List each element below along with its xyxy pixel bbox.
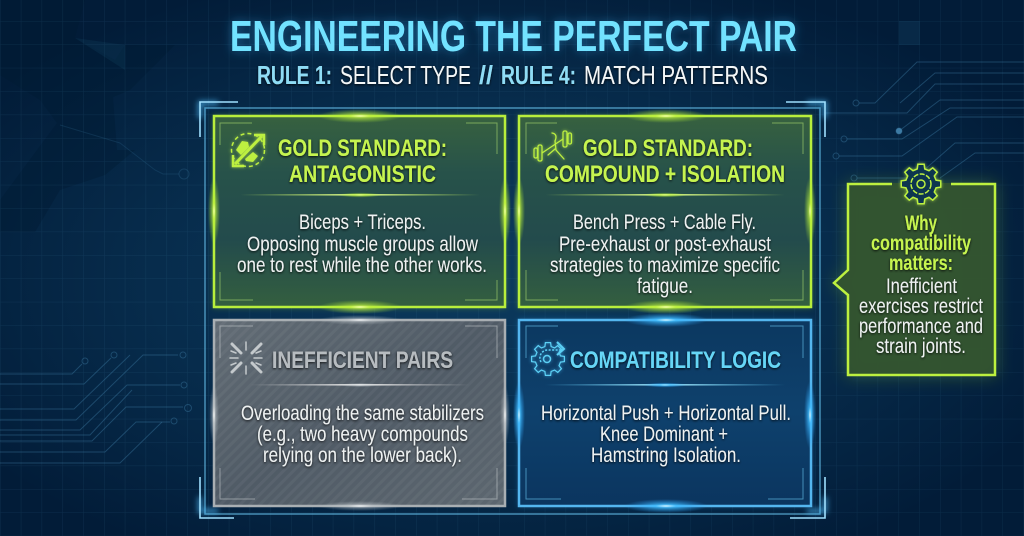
subtitle — [257, 60, 768, 90]
icon: dumbbell lift — [534, 131, 572, 161]
callout body — [859, 275, 983, 358]
body text: Pre-exhaust or post-exhaust — [559, 233, 771, 256]
body text: fatigue. — [637, 275, 693, 298]
callout body: strain joints. — [876, 335, 966, 358]
body text: Biceps + Triceps. — [299, 211, 426, 234]
title: ENGINEERING THE PERFECT PAIR — [230, 12, 797, 61]
icon: opposing arrows with gears — [232, 134, 264, 166]
callout heading: Why — [905, 212, 937, 235]
callout: why compatibility matters — [833, 164, 996, 376]
subtitle: SELECT TYPE — [340, 60, 471, 90]
heading — [278, 135, 447, 188]
callout heading — [871, 212, 971, 275]
body text: (e.g., two heavy compounds — [257, 423, 468, 446]
panel: antagonistic — [208, 109, 511, 314]
callout body: Inefficient — [886, 275, 957, 298]
panel: compound + isolation — [513, 109, 816, 314]
subtitle: RULE 4: — [501, 60, 576, 90]
panel: compatibility logic — [513, 313, 816, 513]
body text — [541, 402, 791, 467]
panel: inefficient pairs — [209, 315, 510, 511]
heading: COMPATIBILITY LOGIC — [570, 347, 781, 374]
heading: GOLD STANDARD: — [278, 135, 447, 162]
body text — [550, 211, 780, 298]
body text: Bench Press + Cable Fly. — [573, 211, 756, 234]
outer tech frame — [200, 102, 825, 518]
icon: gear with arrow — [532, 342, 564, 375]
subtitle: // — [479, 60, 493, 90]
body text: strategies to maximize specific — [550, 254, 780, 277]
heading — [545, 135, 785, 188]
body text: Overloading the same stabilizers — [241, 402, 484, 425]
body text: Horizontal Push + Horizontal Pull. — [541, 402, 791, 425]
divider — [240, 192, 480, 198]
callout body: performance and — [859, 315, 983, 338]
body text: relying on the lower back). — [263, 444, 462, 467]
body text: one to rest while the other works. — [237, 254, 487, 277]
callout heading: matters: — [889, 252, 953, 275]
callout heading: compatibility — [871, 232, 971, 255]
body text: Knee Dominant + — [600, 423, 728, 446]
body text: Opposing muscle groups allow — [247, 233, 479, 256]
body text — [241, 402, 484, 467]
heading: GOLD STANDARD: — [583, 135, 753, 162]
body text: Hamstring Isolation. — [591, 444, 741, 467]
callout body: exercises restrict — [859, 295, 983, 318]
heading: ANTAGONISTIC — [289, 161, 436, 188]
divider — [250, 383, 470, 387]
icon: gear — [901, 164, 941, 204]
subtitle: MATCH PATTERNS — [584, 60, 768, 90]
subtitle: RULE 1: — [257, 60, 332, 90]
icon: colliding arrows burst — [230, 342, 262, 374]
divider — [545, 192, 785, 198]
heading: INEFFICIENT PAIRS — [272, 347, 453, 374]
divider — [545, 382, 785, 388]
body text — [237, 211, 487, 277]
heading: COMPOUND + ISOLATION — [545, 161, 785, 188]
